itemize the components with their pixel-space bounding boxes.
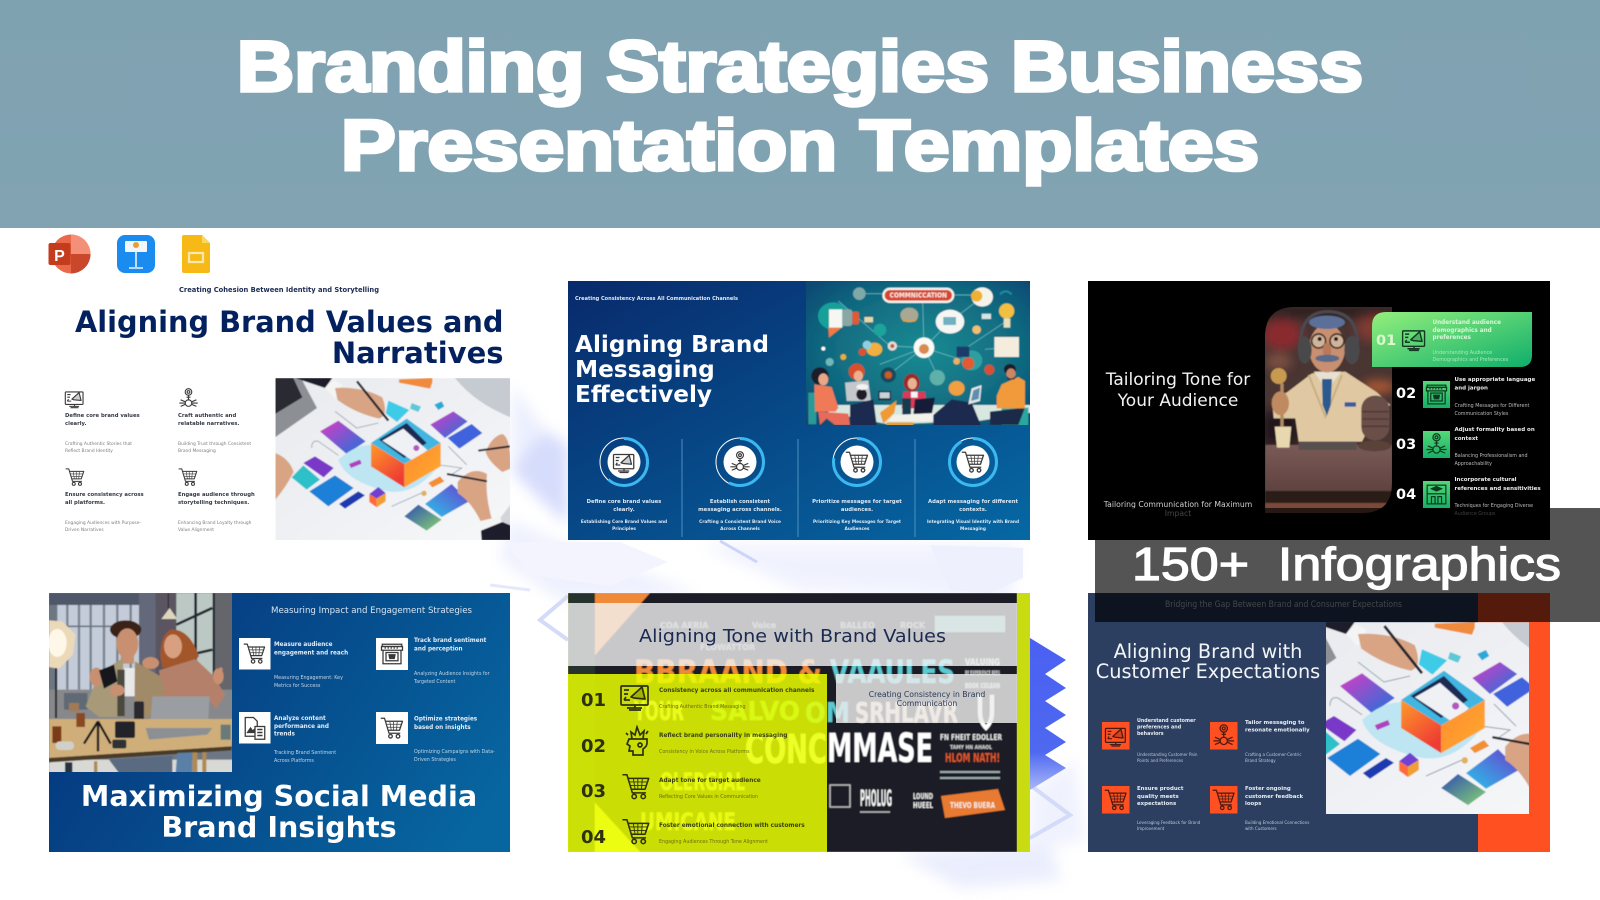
title: Presentation Templates <box>341 107 1259 186</box>
item 01 <box>581 686 815 711</box>
title <box>237 28 1363 186</box>
column 1 <box>581 438 667 532</box>
item: engage audience: Engage audience through <box>178 492 255 498</box>
column 4: Adapt messaging for different <box>928 499 1018 505</box>
item 02 <box>581 727 787 757</box>
item: understand: behaviors <box>1137 731 1164 737</box>
subtitle: Bridging the Gap Between Brand and Consumer Expectations <box>1165 599 1402 609</box>
heading: Brand Insights <box>161 810 397 844</box>
heading: Your Audience <box>1117 391 1238 411</box>
background photo: typography wall: LOUND <box>913 792 933 801</box>
panel: Aligning Brand with Customer Expectations <box>1088 593 1569 852</box>
lime list panel <box>568 674 827 852</box>
illustration: communication team <box>802 278 1035 430</box>
column 1: Establishing Core Brand Values and <box>581 519 667 525</box>
subtitle: Impact <box>1165 509 1191 518</box>
item: ensure: Leveraging Feedback for Brand <box>1137 820 1201 825</box>
background photo: typography wall: BALLEO <box>840 621 875 630</box>
item 02: 02 <box>1396 386 1416 402</box>
illustration: isometric brand box <box>1326 622 1529 814</box>
item: tailor: Crafting a Customer-Centric <box>1245 752 1302 757</box>
subtitle: Communication <box>897 699 957 708</box>
background photo: typography wall: UMICANE <box>640 808 736 836</box>
column 4 <box>927 438 1019 532</box>
item: understand: Understand customer <box>1137 718 1196 724</box>
item: understand: Points and Preferences <box>1137 758 1183 763</box>
item: measure: Measuring Engagement: Key <box>274 675 343 681</box>
panel: Aligning Brand Values and Narratives <box>65 286 511 541</box>
item: consistency <box>65 469 144 533</box>
background photo: typography wall: Voice <box>752 621 777 630</box>
item 01: Crafting Authentic Brand Messaging <box>659 704 746 710</box>
app icons row <box>48 234 210 274</box>
column 4: Integrating Visual Identity with Brand <box>927 519 1019 525</box>
item 03: Reflecting Core Values in Communication <box>659 794 758 800</box>
item: foster: Foster ongoing <box>1245 786 1291 792</box>
heading: Tailoring Tone for <box>1105 370 1250 390</box>
background photo: typography wall: VAAULES <box>830 653 955 691</box>
background photo: typography wall: MMASE <box>827 726 933 772</box>
decorative blue zigzag <box>1030 638 1066 790</box>
heading <box>575 331 769 408</box>
subtitle: Measuring Impact and Engagement Strategies <box>271 605 472 615</box>
heading: Aligning Brand with <box>1114 640 1302 663</box>
subtitle <box>1103 500 1252 518</box>
heading <box>1096 640 1320 683</box>
item: consistency: Engaging Audiences with Purpose- <box>65 520 141 526</box>
item 04 <box>1396 477 1541 517</box>
item 03: Adapt tone for target audience <box>659 778 761 784</box>
orange accent block <box>1478 593 1550 852</box>
item 02: Consistency in Voice Across Platforms <box>659 749 750 755</box>
column 2: Across Channels <box>720 526 760 532</box>
heading: Aligning Brand <box>575 331 769 358</box>
item: understand: Understanding Customer Pain <box>1137 752 1198 757</box>
heading: Aligning Brand Values and <box>75 305 504 339</box>
item: track: Targeted Content <box>413 679 456 685</box>
item 04: Techniques for Engaging Diverse <box>1454 503 1533 509</box>
column 3: audiences. <box>841 507 873 513</box>
background photo: typography wall: ROCK <box>900 621 926 630</box>
item 04: 04 <box>581 827 606 848</box>
item 03: Adjust formality based on <box>1454 427 1535 433</box>
icon: Google Slides <box>182 235 210 273</box>
column 2: Establish consistent <box>710 499 771 505</box>
item: foster: Building Emotional Connections <box>1245 820 1309 825</box>
item: define core values <box>65 392 140 454</box>
item 03: 03 <box>1396 437 1416 453</box>
background photo: typography wall: PHOLUG <box>860 787 892 812</box>
panel: Maximizing Social Media Brand Insights <box>46 590 510 852</box>
item: analyze <box>239 712 336 764</box>
banner: 150+ Infographics: 150+ Infographics <box>1132 538 1561 590</box>
item 02: and jargon <box>1454 386 1488 392</box>
item 03 <box>1396 427 1535 467</box>
item 04: 04 <box>1396 487 1416 503</box>
subtitle: Creating Cohesion Between Identity and Storytelling <box>179 286 379 294</box>
card 01: preferences <box>1432 335 1472 341</box>
item: define core values: clearly. <box>65 421 87 427</box>
item 02: Reflect brand personality in messaging <box>659 733 787 739</box>
item: analyze: performance and <box>274 724 329 730</box>
item 02: Use appropriate language <box>1454 377 1535 383</box>
item 02: Crafting Messages for Different <box>1454 403 1529 409</box>
item: measure: Measure audience <box>274 642 333 648</box>
pill label <box>882 288 954 303</box>
item: tailor: resonate emotionally <box>1245 728 1310 734</box>
item: analyze: Tracking Brand Sentiment <box>273 750 336 756</box>
card 01: Understanding Audience <box>1432 350 1492 356</box>
item: consistency: Ensure consistency across <box>65 492 144 498</box>
card 01: Understand audience <box>1432 320 1501 326</box>
item 02: 02 <box>581 736 606 757</box>
icon: PowerPoint: P <box>54 248 65 265</box>
item 03: 03 <box>581 781 606 802</box>
item: analyze: Analyze content <box>274 716 326 722</box>
item: ensure: quality meets <box>1137 794 1179 800</box>
column 2: Crafting a Consistent Brand Voice <box>699 519 781 525</box>
column 4: Messaging <box>960 526 986 532</box>
heading: Maximizing Social Media <box>81 779 477 813</box>
heading: Aligning Tone with Brand Values <box>639 627 946 647</box>
item 01: 01 <box>581 690 606 711</box>
subtitle: Tailoring Communication for Maximum <box>1103 500 1252 509</box>
column 1: Define core brand values <box>587 499 661 505</box>
item 04: Engaging Audiences Through Tone Alignment <box>659 839 768 845</box>
item 02 <box>1396 377 1535 417</box>
background photo: typography wall: THEVO BUERA <box>950 801 995 810</box>
background photo: typography wall: HUEEL <box>913 801 933 810</box>
panel: Tailoring Tone for Your Audience <box>1088 281 1550 540</box>
item: craft narratives: Brand Messaging <box>178 448 216 454</box>
item: measure: engagement and reach <box>274 650 348 656</box>
column 3 <box>812 438 902 532</box>
item 02: Communication Styles <box>1454 411 1509 417</box>
item: define core values: Crafting Authentic Stories that <box>65 441 132 447</box>
column 3: Prioritizing Key Messages for Target <box>813 519 901 525</box>
item: ensure: Ensure product <box>1137 786 1184 792</box>
background photo: typography wall: BOOK COLEAN <box>965 682 1000 690</box>
background photo: typography wall: CONC <box>745 727 827 773</box>
subtitle: Creating Consistency Across All Communication Channels <box>575 296 738 302</box>
item: track <box>376 638 490 685</box>
item 04 <box>581 820 805 848</box>
heading: Customer Expectations <box>1096 660 1320 683</box>
item 04: Audience Groups <box>1454 511 1496 517</box>
background photo: typography wall: BBRAAND & <box>634 653 822 691</box>
item: craft narratives: Craft authentic and <box>178 413 236 419</box>
translucent title strip <box>568 603 1017 666</box>
item: define core values: Define core brand values <box>65 413 140 419</box>
item: engage audience: storytelling techniques. <box>178 500 249 506</box>
item: understand <box>1102 718 1198 763</box>
illustration: clay presenter with headphones <box>1265 307 1392 513</box>
column 2 <box>698 438 782 532</box>
subtitle <box>869 690 985 708</box>
item 04: references and sensitivities <box>1454 486 1541 492</box>
item 04: Foster emotional connection with customers <box>659 823 805 829</box>
item: engage audience: Enhancing Brand Loyalty through <box>178 520 252 526</box>
background photo: typography wall: OM <box>805 696 850 729</box>
banner: 150+ Infographics <box>1095 508 1600 622</box>
icon: Keynote <box>117 235 155 273</box>
item 03: Approachability <box>1454 461 1492 467</box>
background photo: typography wall: COA AERIA <box>660 621 709 630</box>
item: measure: Metrics for Success <box>274 683 321 689</box>
column 4: contexts. <box>959 507 987 513</box>
item: analyze: trends <box>274 732 296 738</box>
item: ensure: Improvement <box>1137 826 1165 831</box>
illustration: isometric brand box <box>275 378 511 541</box>
column 2: messaging across channels. <box>698 507 782 513</box>
icon: PowerPoint <box>48 234 90 274</box>
item: track: Analyzing Audience Insights for <box>414 671 490 677</box>
item: ensure <box>1102 786 1201 831</box>
item: consistency: all platforms. <box>65 500 105 506</box>
heading: Effectively <box>575 381 712 408</box>
item: engage audience: Value Alignment <box>178 527 214 533</box>
item: optimize: Optimize strategies <box>414 716 478 722</box>
heading: Messaging <box>575 356 715 383</box>
item 04: Incorporate cultural <box>1454 477 1517 483</box>
heading <box>75 305 504 370</box>
item: craft narratives: relatable narratives. <box>178 421 239 427</box>
item: understand: preferences and <box>1137 724 1182 730</box>
column 1: clearly. <box>613 507 635 513</box>
heading <box>1105 370 1250 411</box>
card 01: Demographics and Preferences <box>1432 357 1509 363</box>
item: optimize: Optimizing Campaigns with Data- <box>414 749 495 755</box>
subtitle: Creating Consistency in Brand <box>869 690 985 699</box>
item: foster: customer feedback <box>1245 794 1304 800</box>
background photo: typography wall: VALUING <box>965 658 1000 668</box>
item: foster <box>1210 786 1309 831</box>
column 1: Principles <box>612 526 636 532</box>
item 01: Consistency across all communication channels <box>659 688 815 694</box>
item 03: context <box>1454 436 1478 442</box>
card 01 <box>1372 312 1532 367</box>
background photo: typography wall: OLERGIAL <box>660 768 745 796</box>
item: tailor: Brand Strategy <box>1245 758 1276 763</box>
background photo: typography wall <box>568 593 1017 852</box>
card 01: demographics and <box>1432 328 1492 334</box>
background photo: typography wall: FLOWATTOR <box>700 643 755 652</box>
item: define core values: Reflect Brand Identity <box>65 448 113 454</box>
item: craft narratives <box>178 389 251 454</box>
heading <box>81 779 477 844</box>
background photo: typography wall: BY EXPERIENCE REES <box>965 670 1000 677</box>
item: analyze: Across Platforms <box>274 758 314 764</box>
background photo: typography wall: FN FHEIT EDOLLER <box>940 733 1002 742</box>
panel: Aligning Brand Messaging Effectively <box>568 278 1035 540</box>
dividers <box>682 439 915 537</box>
item 03 <box>581 775 761 802</box>
item: foster: with Customers <box>1245 826 1277 831</box>
column 3: Prioritize messages for target <box>812 499 902 505</box>
item: tailor <box>1210 720 1310 763</box>
item: measure <box>239 638 348 689</box>
background photo: typography wall: HLOM NATH! <box>945 751 1000 765</box>
photo: creators at desk <box>46 590 237 776</box>
item: foster: loops <box>1245 801 1261 807</box>
item: optimize: Driven Strategies <box>414 757 456 763</box>
column 3: Audiences <box>845 526 870 532</box>
background photo: typography wall: YOUR <box>633 697 684 727</box>
pill label: COMMNICCATION <box>890 292 947 300</box>
item: tailor: Tailor messaging to <box>1245 720 1305 726</box>
item: consistency: Driven Narratives <box>65 527 104 533</box>
item: engage audience <box>178 469 255 533</box>
item: optimize <box>376 712 495 763</box>
item: ensure: expectations <box>1137 801 1176 807</box>
translucent subtitle box <box>836 674 1017 723</box>
item: track: and perception <box>414 646 463 652</box>
background photo: typography wall: SALVO <box>710 697 800 727</box>
title: Branding Strategies Business <box>237 28 1363 107</box>
background photo: typography wall: TAMY HN AHAOL <box>950 745 993 751</box>
item: optimize: based on insights <box>414 725 471 731</box>
header band <box>0 0 1600 228</box>
item: craft narratives: Building Trust through Consistent <box>178 441 251 447</box>
item 03: Balancing Professionalism and <box>1454 453 1528 459</box>
background photo: typography wall: SRHLAVR <box>855 696 958 729</box>
heading: Narratives <box>332 336 504 370</box>
item: track: Track brand sentiment <box>414 638 487 644</box>
panel: Aligning Tone with Brand Values <box>568 593 1030 852</box>
card 01: 01 <box>1376 333 1396 349</box>
